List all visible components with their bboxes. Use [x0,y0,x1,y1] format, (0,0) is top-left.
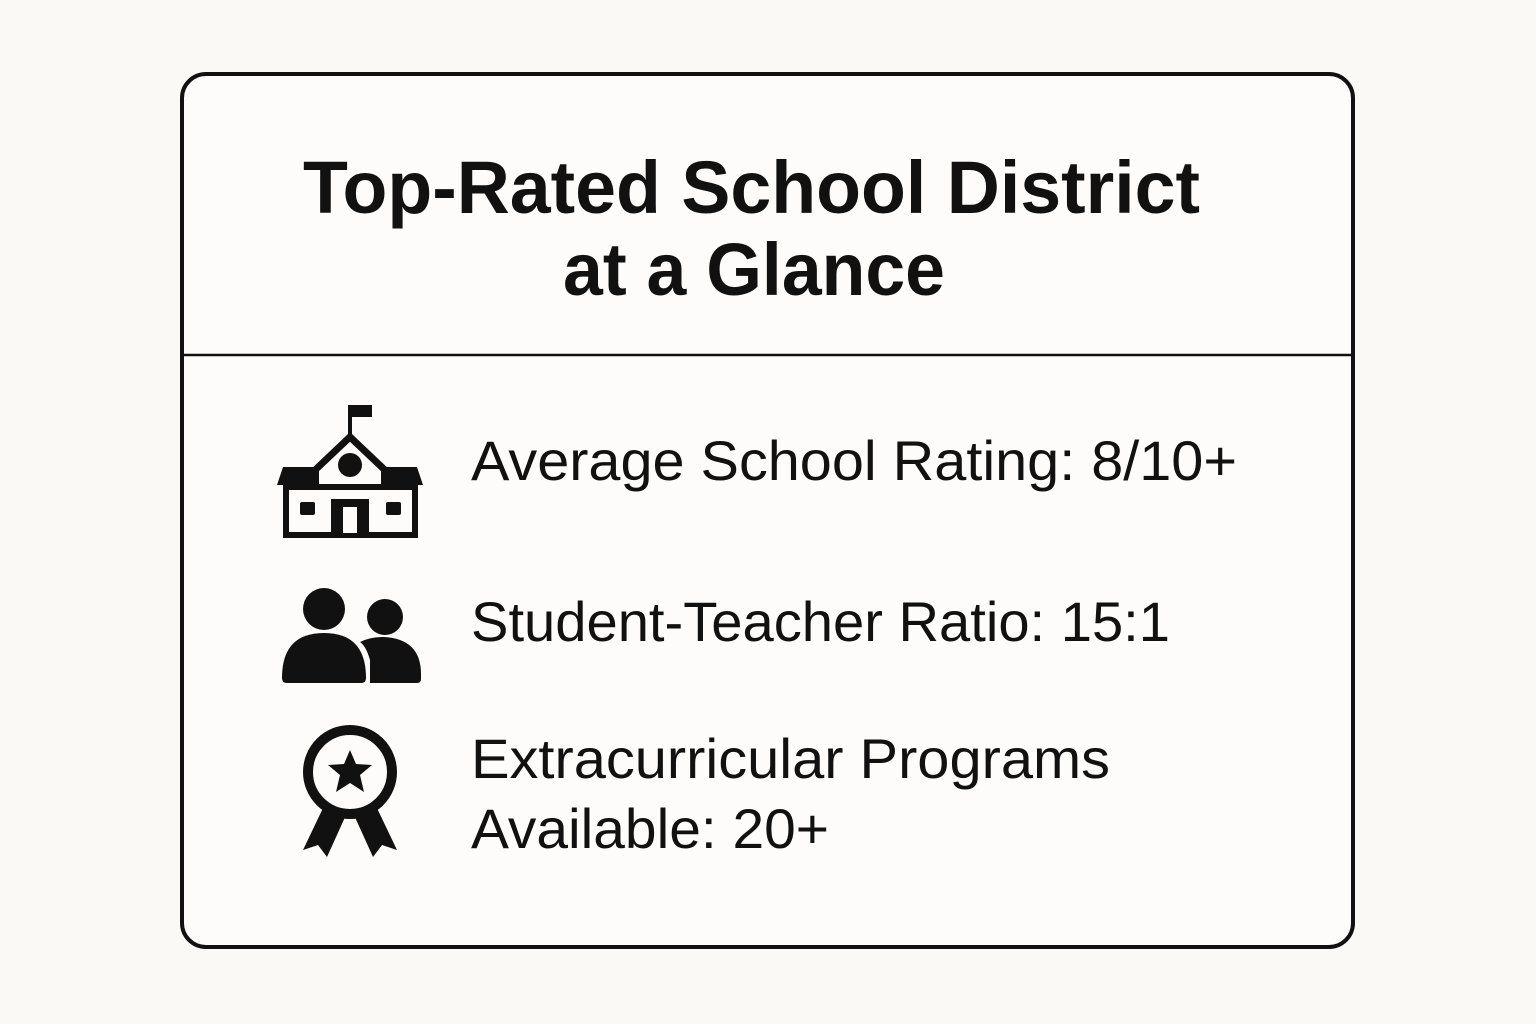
title: at a Glance [563,228,945,311]
icon: award medal [303,730,397,857]
icon: people [282,588,421,683]
text: school rating: Average School Rating: 8/10+ [471,429,1237,492]
title: Top-Rated School District [303,146,1200,229]
text: extracurricular: Extracurricular Programs [471,727,1110,790]
panel: card [182,74,1353,947]
text: ratio: Student-Teacher Ratio: 15:1 [471,590,1170,653]
icon: school [277,405,423,537]
text: extracurricular [471,727,1110,860]
title [303,146,1200,311]
text: extracurricular: Available: 20+ [471,797,829,860]
